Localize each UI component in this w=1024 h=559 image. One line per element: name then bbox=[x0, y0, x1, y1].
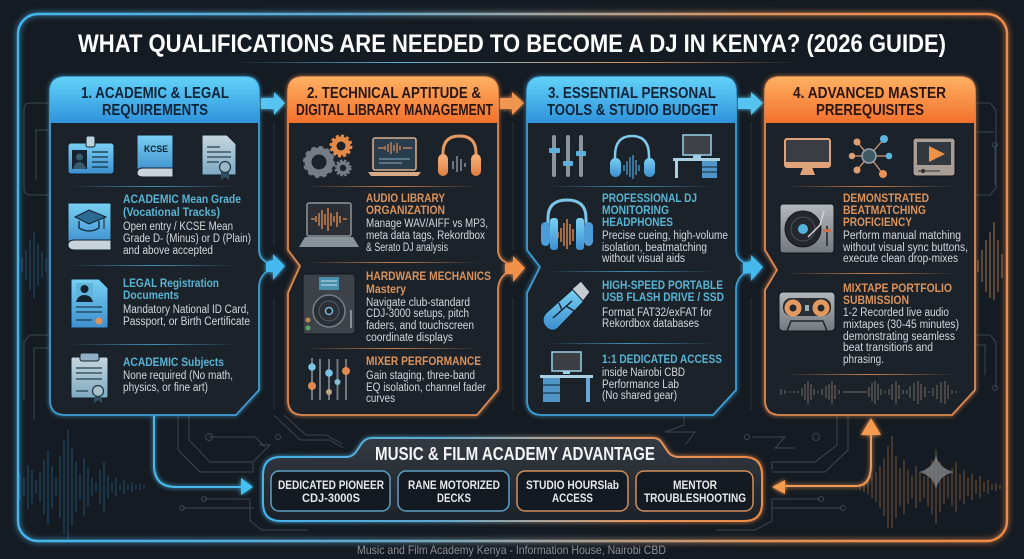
icon: sparkle bbox=[919, 454, 954, 490]
item: mixtape portfolio: 1-2 Recorded live audio bbox=[843, 307, 949, 319]
item: academic mean grade: Grade D- (Minus) or D (Plain) bbox=[123, 233, 251, 245]
item: mixer performance: Gain staging, three-band bbox=[366, 370, 475, 382]
panel 1 header bbox=[50, 77, 259, 123]
icon: sliders bbox=[549, 137, 586, 175]
chip: Pioneer bbox=[271, 471, 390, 511]
panel 2 header: DIGITAL LIBRARY MANAGEMENT bbox=[296, 102, 493, 119]
panel 1: academic and legal requirements bbox=[50, 77, 272, 415]
item: mixtape portfolio bbox=[779, 281, 959, 366]
connector: panel 1 to advantage box bbox=[154, 416, 253, 495]
item: audio library: ORGANIZATION bbox=[366, 203, 445, 217]
panel 2 header: 2. TECHNICAL APTITUDE & bbox=[307, 85, 481, 102]
item: mixtape portfolio: mixtapes (30-45 minutes) bbox=[843, 319, 959, 331]
arrow: panel 2 to 3, middle bbox=[505, 256, 525, 282]
waveform: right edge bbox=[978, 222, 1002, 300]
item: headphones: isolation, beatmatching bbox=[602, 242, 707, 254]
panel 1 header: REQUIREMENTS bbox=[102, 102, 208, 119]
panel 2: technical aptitude bbox=[288, 77, 511, 415]
item: USB drive: Rekordbox databases bbox=[602, 318, 699, 330]
icon: certificate bbox=[202, 135, 236, 180]
item: hardware mechanics: faders, and touchscreen bbox=[366, 320, 474, 332]
panel 3 header bbox=[527, 77, 736, 123]
panel 4 header: PREREQUISITES bbox=[816, 102, 924, 119]
item: hardware mechanics: Navigate club-standard bbox=[366, 297, 470, 309]
icon: KCSE book: KCSE bbox=[144, 144, 168, 154]
icon: graduation book bbox=[68, 203, 111, 250]
chip: Rane: DECKS bbox=[437, 491, 471, 505]
item: audio library: Manage WAV/AIFF vs MP3, bbox=[366, 218, 488, 230]
item: USB drive bbox=[543, 278, 724, 330]
item: headphones: MONITORING bbox=[602, 203, 669, 217]
item: legal registration bbox=[71, 276, 250, 328]
item: academic mean grade: ACADEMIC Mean Grade bbox=[123, 192, 241, 206]
chip: studio hours: ACCESS bbox=[552, 491, 593, 505]
item: mixtape portfolio: MIXTAPE PORTFOLIO bbox=[843, 281, 952, 295]
waveform: bottom left bbox=[20, 430, 144, 540]
icon: blue headphones bbox=[610, 136, 655, 179]
chip: studio hours: STUDIO HOURSlab bbox=[526, 478, 619, 492]
panel 1 header: 1. ACADEMIC & LEGAL bbox=[81, 85, 229, 102]
chip: mentor: TROUBLESHOOTING bbox=[644, 491, 746, 505]
panel: Music and Film Academy advantage bbox=[263, 438, 762, 521]
icon: mixer faders bbox=[308, 358, 350, 400]
icon: laptop bbox=[299, 203, 359, 247]
panel 3: essential personal tools bbox=[527, 77, 749, 415]
item: mixer performance: EQ isolation, channel fader bbox=[366, 382, 486, 394]
waveform: left edge bbox=[22, 232, 46, 298]
icon: USB drive bbox=[543, 281, 590, 330]
item: academic subjects: physics, or fine art) bbox=[123, 382, 208, 394]
item: academic mean grade: Open entry / KCSE Mean bbox=[123, 221, 233, 233]
item: mixtape portfolio: demonstrating seamless bbox=[843, 331, 955, 343]
item: headphones: without visual aids bbox=[601, 253, 685, 265]
item: academic mean grade: and above accepted bbox=[123, 245, 213, 257]
item: beatmatching: DEMONSTRATED bbox=[843, 191, 929, 205]
icon: monitor bbox=[785, 139, 830, 175]
connector: advantage box to panel 4 bbox=[772, 418, 881, 494]
item: hardware mechanics: Mastery bbox=[366, 282, 406, 296]
circuit traces background bbox=[24, 103, 998, 530]
arrow: panel 1 to 2, middle bbox=[266, 254, 285, 280]
item: dedicated access: 1:1 DEDICATED ACCESS bbox=[602, 352, 722, 366]
item: audio library: meta data tags, Rekordbox bbox=[366, 230, 485, 242]
icon: video player bbox=[913, 138, 955, 176]
arrow: panel 1 to 2, top bbox=[261, 92, 285, 115]
item: hardware mechanics: HARDWARE MECHANICS bbox=[366, 269, 491, 283]
icon: cassette bbox=[779, 292, 835, 331]
item: mixer performance: MIXER PERFORMANCE bbox=[366, 354, 481, 368]
chip: mentor bbox=[636, 471, 753, 511]
panel 4 header bbox=[765, 77, 975, 123]
item: dedicated access: inside Nairobi CBD bbox=[602, 367, 685, 379]
icon: gears bbox=[305, 136, 351, 176]
item: beatmatching: Perform manual matching bbox=[843, 230, 961, 242]
item: academic subjects: ACADEMIC Subjects bbox=[123, 355, 224, 369]
item: USB drive: HIGH-SPEED PORTABLE bbox=[602, 278, 723, 292]
item: hardware mechanics: coordinate displays bbox=[366, 332, 453, 344]
item: mixtape portfolio: phrasing. bbox=[843, 354, 884, 366]
item: academic mean grade bbox=[68, 192, 251, 257]
waveform: panel 4 bbox=[781, 381, 956, 404]
item: beatmatching: execute clean drop-mixes bbox=[843, 253, 958, 265]
item: audio library: AUDIO LIBRARY bbox=[366, 191, 445, 205]
item: headphones bbox=[541, 191, 728, 265]
item: beatmatching bbox=[780, 191, 968, 265]
item: legal registration: Passport, or Birth Certificate bbox=[123, 316, 250, 328]
arrow: panel 2 to 3, top bbox=[500, 92, 524, 115]
item: academic subjects: None required (No math, bbox=[123, 370, 233, 382]
item: headphones: HEADPHONES bbox=[602, 215, 673, 229]
advantage heading: MUSIC & FILM ACADEMY ADVANTAGE bbox=[375, 444, 655, 464]
item: audio library bbox=[299, 191, 488, 254]
item: legal registration: Documents bbox=[123, 288, 179, 302]
chip: studio hours bbox=[517, 471, 628, 511]
panel 3 header: TOOLS & STUDIO BUDGET bbox=[547, 102, 718, 119]
item: dedicated access: (No shared gear) bbox=[602, 390, 677, 402]
item: hardware mechanics: CDJ-3000 setups, pitch bbox=[366, 308, 469, 320]
panel 2 header bbox=[288, 77, 498, 123]
chip: mentor: MENTOR bbox=[673, 478, 717, 492]
item: audio library: & Serato DJ analysis bbox=[366, 242, 448, 254]
icon: network nodes bbox=[849, 135, 892, 178]
chip: Pioneer: CDJ-3000S bbox=[302, 491, 360, 505]
arrow: panel 3 to 4, top bbox=[738, 92, 763, 115]
item: legal registration: LEGAL Registration bbox=[123, 276, 219, 290]
icon: desk with monitor bbox=[673, 135, 720, 178]
item: mixer performance bbox=[308, 354, 486, 405]
item: headphones: Precise cueing, high-volume bbox=[602, 230, 728, 242]
chip: Rane bbox=[398, 471, 509, 511]
icon: ID card bbox=[68, 136, 114, 174]
icon: registration document bbox=[71, 279, 108, 328]
item: beatmatching: BEATMATCHING bbox=[843, 203, 926, 217]
item: academic subjects bbox=[71, 353, 233, 403]
arrow: panel 3 to 4, middle bbox=[743, 255, 763, 281]
item: USB drive: USB FLASH DRIVE / SSD bbox=[602, 290, 724, 304]
item: legal registration: Mandatory National ID Card, bbox=[123, 304, 249, 316]
icon: large headphones bbox=[541, 200, 593, 250]
panel 4: advanced master prerequisites bbox=[765, 77, 975, 415]
item: dedicated access: Performance Lab bbox=[602, 379, 679, 391]
panel 3 header: 3. ESSENTIAL PERSONAL bbox=[548, 85, 716, 102]
waveform: bottom right bbox=[860, 436, 1000, 528]
icon: turntable bbox=[780, 204, 834, 253]
item: mixtape portfolio: beat transitions and bbox=[843, 342, 933, 354]
chip: Rane: RANE MOTORIZED bbox=[408, 478, 500, 492]
icon: desk workstation bbox=[540, 352, 593, 402]
item: beatmatching: without visual sync buttons, bbox=[842, 242, 968, 254]
item: USB drive: Format FAT32/exFAT for bbox=[602, 307, 712, 319]
item: headphones: PROFESSIONAL DJ bbox=[602, 191, 697, 205]
footer: Music and Film Academy Kenya - Information House, Nairobi CBD bbox=[357, 543, 666, 557]
item: hardware mechanics bbox=[303, 269, 491, 344]
icon: laptop with waveform bbox=[368, 138, 421, 176]
item: beatmatching: PROFICIENCY bbox=[843, 215, 912, 229]
icon: orange headphones bbox=[438, 136, 481, 176]
item: academic mean grade: (Vocational Tracks) bbox=[123, 205, 220, 219]
icon: KCSE book bbox=[137, 135, 173, 177]
chip: Pioneer: DEDICATED PIONEER bbox=[278, 478, 384, 492]
icon: CDJ deck bbox=[303, 274, 355, 334]
item: mixer performance: curves bbox=[366, 393, 395, 405]
icon: clipboard bbox=[71, 353, 108, 403]
panel 4 header: 4. ADVANCED MASTER bbox=[793, 85, 946, 102]
item: dedicated access bbox=[540, 352, 722, 402]
item: mixtape portfolio: SUBMISSION bbox=[843, 293, 909, 307]
